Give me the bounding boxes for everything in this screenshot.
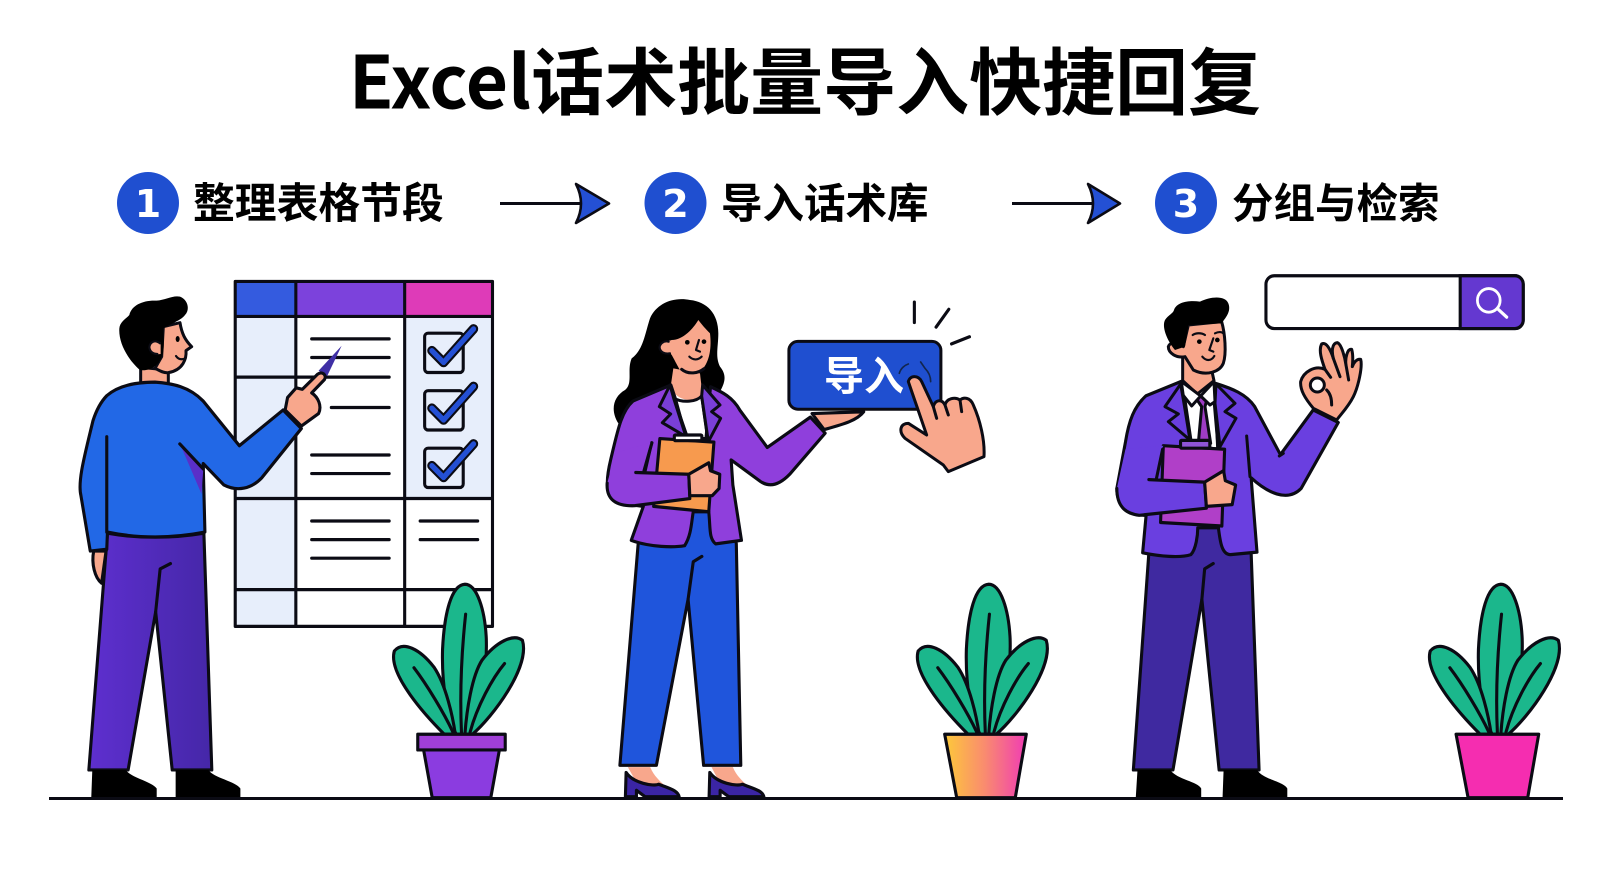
step 2 heading: [644, 170, 929, 234]
pants: [620, 508, 741, 765]
pen: [319, 346, 342, 376]
hand on clipboard: [689, 463, 720, 496]
ground line: [49, 797, 1563, 800]
shoes: [1136, 770, 1287, 798]
forearm: [607, 442, 690, 506]
step 3 heading: 3: [1173, 182, 1199, 226]
icon: magnifier: [1477, 289, 1507, 317]
pointing hand with click: [899, 302, 984, 472]
checkbox 1: [425, 329, 474, 372]
title: Excel话术批量导入快捷回复: [349, 24, 1261, 130]
shirt and tie: [1182, 382, 1218, 450]
checkbox 3: [425, 444, 474, 487]
lower body and jacket: [1117, 381, 1338, 798]
left hand: [93, 551, 106, 583]
checkbox 2: [425, 386, 474, 430]
purple clipboard: [1161, 440, 1225, 526]
pants: [1133, 524, 1259, 770]
clipboard and arm: [607, 412, 864, 512]
step 1 heading: 1: [135, 182, 161, 226]
click sparks: [914, 302, 969, 344]
spreadsheet board: [235, 281, 492, 626]
step 3 heading: 分组与检索: [1232, 170, 1440, 230]
plant 2: [917, 584, 1047, 798]
head: [119, 296, 192, 384]
ok hand: [1301, 343, 1361, 420]
pointing hand: [285, 373, 325, 426]
step 3 heading: [1155, 170, 1440, 234]
lapels: [645, 385, 721, 472]
palm under button: [812, 412, 864, 430]
white blouse: [674, 396, 708, 443]
lapels: [1165, 384, 1283, 477]
search bar: [1266, 276, 1523, 329]
hand on clipboard: [1205, 471, 1236, 506]
arrow 2 to 3: [1012, 184, 1120, 223]
person 2 holding clipboard: [607, 299, 864, 797]
pants: [89, 533, 212, 770]
arrow 1 to 2: [500, 184, 609, 223]
plant 1: [394, 584, 524, 798]
ankles and heels: [625, 767, 764, 797]
lower body and jacket: [607, 385, 825, 797]
shoes: [91, 770, 240, 798]
click arcs and hand: [899, 362, 984, 472]
step 1 heading: 整理表格节段: [193, 171, 444, 231]
jacket: [607, 385, 825, 547]
step 2 heading: 导入话术库: [721, 170, 929, 230]
clipboard and arm: [1117, 440, 1236, 526]
person 1 pointing at table: [80, 296, 342, 798]
jacket: [1117, 381, 1338, 557]
plant 3: [1429, 584, 1559, 798]
sweater: [80, 382, 301, 551]
person 3 with ok gesture: [1117, 297, 1361, 798]
import button: [789, 341, 941, 409]
forearm: [1117, 446, 1206, 515]
head and long hair: [614, 299, 725, 423]
import button: 导入: [824, 344, 904, 402]
lower body and sweater: [80, 346, 342, 798]
head: [1164, 297, 1229, 394]
step 2 heading: 2: [662, 182, 689, 226]
orange clipboard: [654, 435, 714, 512]
